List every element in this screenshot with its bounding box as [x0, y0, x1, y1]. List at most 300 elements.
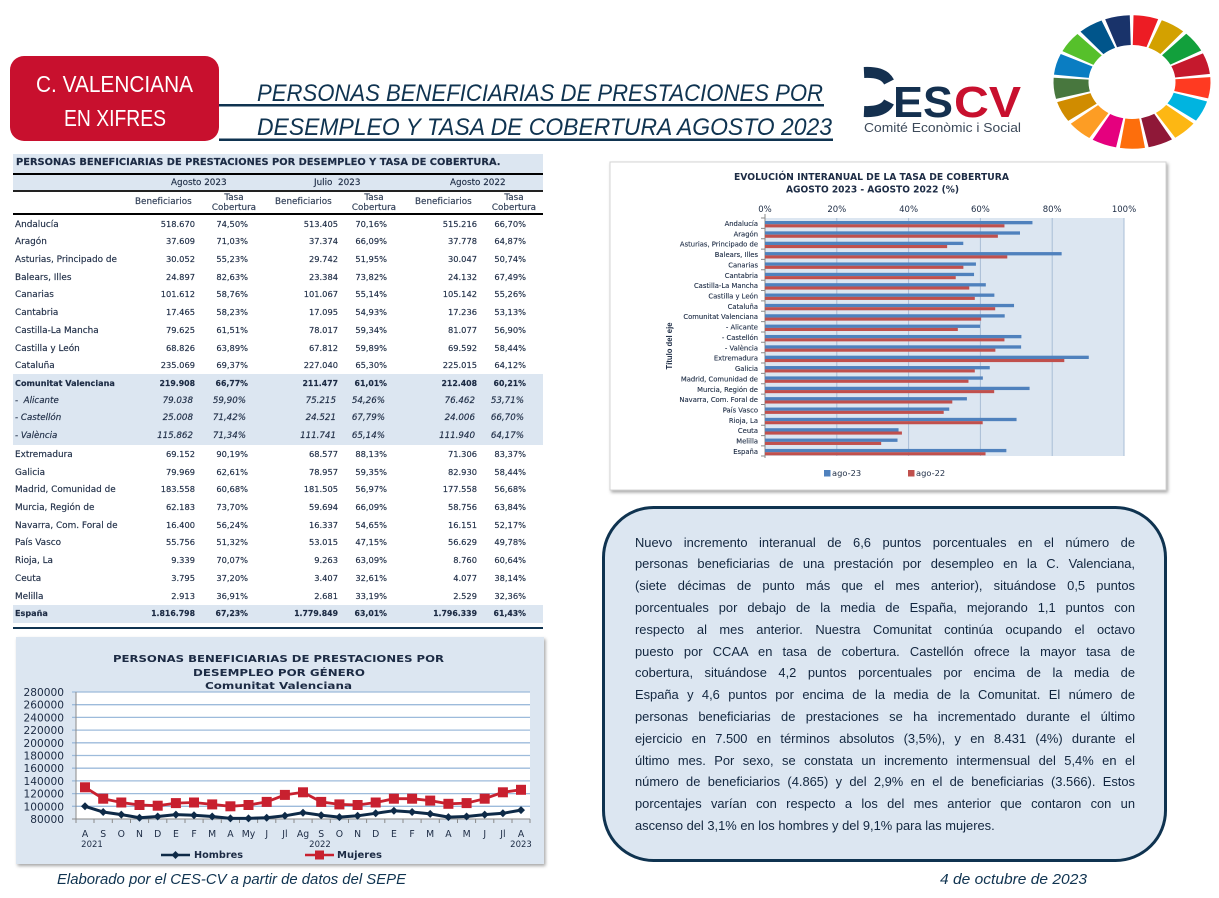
table body rows: 16.337 — [309, 520, 338, 530]
category labels: Ceuta — [738, 427, 758, 435]
table body rows: 9.263 — [314, 555, 338, 565]
table body rows: 24.006 — [445, 413, 475, 423]
table body rows: 24.521 — [306, 413, 336, 423]
table body rows: Extremadura — [15, 450, 73, 460]
table body rows: 24.897 — [166, 272, 195, 282]
table body rows: 55.756 — [166, 537, 195, 547]
table body rows: 37.609 — [166, 236, 195, 246]
panel: line chart by gender — [16, 637, 544, 864]
x axis labels: A — [82, 829, 89, 840]
table column header: Beneficiarios — [275, 197, 332, 207]
x axis labels: J — [482, 829, 486, 840]
table body rows: 30.052 — [166, 254, 195, 264]
table body rows: 25.008 — [163, 413, 193, 423]
title — [219, 80, 833, 141]
table body rows: 59,90% — [213, 396, 246, 406]
x axis labels: M — [426, 829, 434, 840]
table body rows: 61,43% — [494, 609, 526, 618]
x axis labels: J — [264, 829, 268, 840]
category labels: - Alicante — [726, 324, 758, 332]
percentage axis: 60% — [971, 205, 990, 215]
table period header: Julio 2023 — [314, 178, 360, 188]
table body rows: 17.236 — [448, 307, 477, 317]
table body rows: 78.957 — [309, 467, 338, 477]
category labels: - València — [725, 344, 758, 352]
table body rows: 51,32% — [216, 537, 248, 547]
category labels: Madrid, Comunidad de — [681, 375, 758, 383]
x axis labels: S — [100, 829, 106, 840]
table body rows: 1.779.849 — [294, 609, 338, 618]
text block: commentary: ejercicio en 7.500 en términos absolutos (3,5%), y en 8.431 (4%) durante el — [635, 731, 1135, 746]
table body rows: 49,78% — [494, 537, 526, 547]
table column header: Beneficiarios — [415, 197, 472, 207]
line chart title: PERSONAS BENEFICIARIAS DE PRESTACIONES POR — [113, 654, 444, 665]
table body rows: 76.462 — [445, 396, 475, 406]
table body rows: 71,42% — [213, 413, 246, 423]
text block: commentary: ascenso del 3,1% en los hombres y del 9,1% para las mujeres. — [635, 818, 995, 833]
table bottom rule — [13, 627, 543, 629]
table body rows: 70,16% — [355, 218, 387, 228]
table body rows: 1.796.339 — [433, 609, 477, 618]
bar chart legend: ago-23 — [832, 468, 861, 478]
table title: PERSONAS BENEFICIARIAS DE PRESTACIONES POR DESEMPLEO Y TASA DE COBERTURA. — [16, 157, 501, 168]
table body rows: 219.908 — [159, 379, 195, 388]
text block: commentary: cobertura, situándose 4,2 puntos porcentuales por encima de la media de — [635, 665, 1135, 680]
category labels: Comunitat Valenciana — [683, 313, 758, 321]
table body rows: 32,61% — [355, 573, 387, 583]
bars: ago-22 — [765, 224, 1064, 455]
table body rows: Ceuta — [15, 574, 41, 584]
y axis labels: 80000 — [30, 814, 64, 826]
table body rows: 88,13% — [355, 449, 387, 459]
x axis labels: D — [372, 829, 379, 840]
table body rows: 2.529 — [453, 591, 477, 601]
percentage axis: 80% — [1043, 205, 1062, 215]
percentage axis: 20% — [827, 205, 846, 215]
text block: commentary: respecto al mes anterior. Nuestra Comunitat continúa ocupando el octavo — [635, 622, 1135, 637]
table body rows: 60,21% — [494, 379, 526, 388]
table body rows: 74,50% — [216, 218, 248, 228]
table body rows: 66,09% — [355, 502, 387, 512]
table body rows: 513.405 — [304, 218, 338, 228]
table body rows: 518.670 — [161, 218, 195, 228]
table body rows: 58,76% — [216, 289, 248, 299]
y axis labels: 120000 — [24, 789, 64, 801]
table column header: Beneficiarios — [135, 197, 192, 207]
table body rows: Asturias, Principado de — [15, 255, 117, 265]
table column header — [13, 192, 543, 215]
table body rows: Castilla-La Mancha — [15, 326, 99, 336]
table body rows: 90,19% — [216, 449, 248, 459]
x axis labels: A — [227, 829, 234, 840]
table body rows: 70,07% — [216, 555, 248, 565]
table title — [13, 154, 543, 173]
category labels: España — [733, 448, 758, 456]
panel: bar chart of coverage rate — [610, 162, 1166, 490]
table body rows: 115.862 — [157, 431, 193, 441]
bar chart title: AGOSTO 2023 - AGOSTO 2022 (%) — [786, 184, 959, 196]
x axis labels: 2021 — [81, 840, 103, 850]
table body rows: 38,14% — [494, 573, 526, 583]
table body rows: 54,65% — [355, 520, 387, 530]
plot area and gridlines — [72, 692, 530, 823]
percentage axis: 40% — [899, 205, 918, 215]
table body rows — [13, 218, 543, 623]
table body rows: 83,37% — [494, 449, 526, 459]
table body rows: 73,70% — [216, 502, 248, 512]
x axis labels: O — [336, 829, 343, 840]
table body rows: Cantabria — [15, 308, 58, 318]
table body rows: 78.017 — [309, 325, 338, 335]
table period header: Agosto 2023 — [171, 178, 227, 188]
category labels: Melilla — [736, 438, 758, 446]
table body rows: 32,36% — [494, 591, 526, 601]
axis title: Título del eje — [664, 322, 674, 370]
table body rows: 101.612 — [161, 289, 195, 299]
bar chart legend: ago-22 — [916, 468, 945, 478]
table body rows: 65,14% — [352, 431, 385, 441]
table body rows: 82,63% — [216, 272, 248, 282]
table body rows: Rioja, La — [15, 556, 53, 566]
table body rows: 9.339 — [171, 555, 195, 565]
x axis labels — [81, 829, 532, 850]
table body rows: 56,90% — [494, 325, 526, 335]
table body rows: 47,15% — [355, 537, 387, 547]
percentage axis: 0% — [758, 205, 772, 215]
badge: C. Valenciana en xifres — [10, 56, 219, 141]
table body rows: 64,12% — [494, 360, 526, 370]
table body rows: 56,68% — [494, 484, 526, 494]
table body rows: 64,87% — [494, 236, 526, 246]
table period header — [13, 173, 543, 192]
category labels: Navarra, Com. Foral de — [679, 396, 758, 404]
table body rows: 62,61% — [216, 467, 248, 477]
table body rows: 66,70% — [494, 218, 526, 228]
table column header: Tasa — [504, 193, 524, 203]
line chart title: DESEMPLEO POR GÉNERO — [193, 666, 365, 679]
table body rows: 58,44% — [494, 467, 526, 477]
bar chart legend — [824, 468, 945, 478]
badge: C. Valenciana en xifres: EN XIFRES — [64, 105, 166, 131]
y axis labels: 280000 — [24, 687, 64, 699]
table body rows: 36,91% — [216, 591, 248, 601]
category labels: Cantabria — [725, 272, 758, 280]
x axis labels: F — [191, 829, 197, 840]
table body rows: 8.760 — [453, 555, 477, 565]
x axis labels: 2022 — [309, 840, 331, 850]
line chart title — [113, 654, 444, 692]
table body rows: 58,44% — [494, 343, 526, 353]
table body rows: 71,34% — [213, 431, 246, 441]
table body rows: 63,89% — [216, 343, 248, 353]
table body rows: 58,23% — [216, 307, 248, 317]
x axis labels: My — [242, 829, 256, 840]
y axis labels — [24, 687, 64, 826]
table body rows: 37,20% — [216, 573, 248, 583]
table body rows: Cataluña — [15, 361, 55, 371]
table body rows: Balears, Illes — [15, 273, 71, 283]
table body rows: 111.940 — [439, 431, 475, 441]
badge: C. Valenciana en xifres: C. VALENCIANA — [36, 71, 194, 97]
table body rows: 4.077 — [453, 573, 477, 583]
x axis labels: A — [518, 829, 525, 840]
category labels: Galicia — [735, 365, 758, 373]
bar chart title: EVOLUCIÓN INTERANUAL DE LA TASA DE COBERTURA — [734, 171, 1010, 183]
text block: commentary: personas beneficiarias de una prestación por desempleo en la C. Valenciana, — [635, 556, 1135, 571]
table body rows: 17.465 — [166, 307, 195, 317]
table body rows: 69,37% — [216, 360, 248, 370]
logo: CES CV: CV — [954, 78, 1022, 127]
table body rows: 62.183 — [166, 502, 195, 512]
category labels: Castilla-La Mancha — [694, 282, 758, 290]
category labels: País Vasco — [723, 406, 758, 414]
y axis labels: 260000 — [24, 700, 64, 712]
table body rows: 58.756 — [448, 502, 477, 512]
table body rows: 75.215 — [306, 396, 336, 406]
table column header: Cobertura — [212, 203, 256, 213]
text block: commentary: número de beneficiarios (4.865) y del 2,9% en el de beneficiarias (3.566). Estos — [635, 774, 1135, 789]
category labels: Murcia, Región de — [697, 386, 758, 394]
y axis labels: 220000 — [24, 725, 64, 737]
table body rows: 79.625 — [166, 325, 195, 335]
table body rows: 50,74% — [494, 254, 526, 264]
table body rows: 105.142 — [443, 289, 477, 299]
x axis labels: O — [118, 829, 125, 840]
table body rows: 17.095 — [309, 307, 338, 317]
logo: CES CV: Comité Econòmic i Social — [864, 121, 1021, 135]
line chart legend: Mujeres — [337, 850, 382, 861]
table body rows: 53,71% — [491, 396, 524, 406]
table body rows: - Castellón — [15, 413, 61, 423]
title: PERSONAS BENEFICIARIAS DE PRESTACIONES POR — [257, 80, 823, 107]
table body rows: 54,26% — [352, 396, 385, 406]
table body rows: 24.132 — [448, 272, 477, 282]
table body rows: 54,93% — [355, 307, 387, 317]
table body rows: 59,34% — [355, 325, 387, 335]
table body rows: 67.812 — [309, 343, 338, 353]
table body rows: Comunitat Valenciana — [15, 378, 115, 388]
y axis labels: 160000 — [24, 763, 64, 775]
table body rows: 33,19% — [355, 591, 387, 601]
table body rows: 65,30% — [355, 360, 387, 370]
table column header: Tasa — [364, 193, 384, 203]
text block: commentary: personas beneficiarias de prestaciones se ha incrementado durante el último — [635, 709, 1135, 724]
line chart legend — [161, 850, 382, 861]
table body rows: 82.930 — [448, 467, 477, 477]
table body rows: Navarra, Com. Foral de — [15, 521, 118, 531]
category labels: Castilla y León — [708, 292, 758, 300]
table body rows: 53.015 — [309, 537, 338, 547]
table body rows: 66,70% — [491, 413, 524, 423]
table body rows: 66,77% — [216, 379, 248, 388]
table body rows: 212.408 — [441, 379, 477, 388]
table body rows: 59,35% — [355, 467, 387, 477]
table body rows: 177.558 — [443, 484, 477, 494]
text block: commentary: porcentajes varían con respecto a los del mes anterior que contaron con un — [635, 796, 1135, 811]
table body rows: 37.778 — [448, 236, 477, 246]
category labels: Balears, Illes — [715, 251, 758, 259]
table body rows: Castilla y León — [15, 344, 80, 354]
table body rows: 67,23% — [216, 609, 248, 618]
table body rows: 2.913 — [171, 591, 195, 601]
text block: commentary: porcentuales por debajo de la media de España, mejorando 1,1 puntos con — [635, 600, 1135, 615]
table body rows: 73,82% — [355, 272, 387, 282]
table body rows: 515.216 — [443, 218, 477, 228]
x axis labels: D — [154, 829, 161, 840]
category labels: Cataluña — [728, 303, 758, 311]
table body rows: 111.741 — [300, 431, 336, 441]
table body rows: 60,68% — [216, 484, 248, 494]
table body rows: 69.592 — [448, 343, 477, 353]
title: DESEMPLEO Y TASA DE COBERTURA AGOSTO 2023 — [257, 114, 833, 141]
x axis labels: Ag — [297, 829, 309, 840]
table body rows: 1.816.798 — [151, 609, 195, 618]
text block: commentary: puesto por CCAA en tasa de cobertura. Castellón ofrece la mayor tasa de — [635, 644, 1135, 659]
x axis labels: E — [391, 829, 397, 840]
table body rows: - València — [15, 431, 57, 441]
table body rows: España — [15, 608, 48, 618]
table body rows: 81.077 — [448, 325, 477, 335]
table body rows: 61,01% — [355, 379, 387, 388]
x axis labels: N — [136, 829, 143, 840]
panel: data table — [13, 154, 543, 629]
icon: SDG colour wheel — [1046, 9, 1218, 155]
category labels: Andalucía — [725, 220, 758, 228]
table body rows: 69.152 — [166, 449, 195, 459]
bars: ago-23 — [765, 221, 1089, 452]
table body rows: 211.477 — [302, 379, 338, 388]
category labels — [679, 220, 758, 456]
table body rows: País Vasco — [15, 538, 61, 548]
category labels: Asturias, Principado de — [680, 241, 758, 249]
table body rows: 52,17% — [494, 520, 526, 530]
logo: CES CV — [864, 72, 1022, 135]
category labels: Rioja, La — [729, 417, 758, 425]
table body rows: 63,09% — [355, 555, 387, 565]
table body rows: 55,26% — [494, 289, 526, 299]
category labels: - Castellón — [722, 334, 758, 342]
table body rows: 2.681 — [314, 591, 338, 601]
table body rows: Andalucía — [15, 220, 59, 230]
table body rows: 66,09% — [355, 236, 387, 246]
table body rows: 60,64% — [494, 555, 526, 565]
x axis labels: N — [354, 829, 361, 840]
table column header: Cobertura — [492, 203, 536, 213]
table body rows: 16.151 — [448, 520, 477, 530]
x axis labels: E — [173, 829, 179, 840]
table column header: Cobertura — [352, 203, 396, 213]
table body rows: Madrid, Comunidad de — [15, 485, 116, 495]
table body rows: 64,17% — [491, 431, 524, 441]
text block: commentary: Nuevo incremento interanual de 6,6 puntos porcentuales en el número de — [635, 534, 1135, 550]
table body rows: 59,89% — [355, 343, 387, 353]
y axis labels: 100000 — [24, 801, 64, 813]
table body rows: 56,24% — [216, 520, 248, 530]
table body rows: Canarias — [15, 290, 54, 300]
y axis labels: 180000 — [24, 750, 64, 762]
table body rows: 68.577 — [309, 449, 338, 459]
x axis labels: Jl — [499, 829, 506, 840]
x axis labels: A — [445, 829, 452, 840]
x axis labels: M — [208, 829, 216, 840]
percentage axis — [758, 205, 1136, 215]
line: Mujeres — [85, 787, 521, 806]
x axis labels: F — [409, 829, 415, 840]
table body rows: 55,14% — [355, 289, 387, 299]
y axis labels: 200000 — [24, 738, 64, 750]
table body rows: Melilla — [15, 592, 43, 602]
table body rows: 53,13% — [494, 307, 526, 317]
x axis labels: 2023 — [510, 840, 532, 850]
table body rows: 79.969 — [166, 467, 195, 477]
category labels: Extremadura — [714, 355, 758, 363]
table body rows: 79.038 — [163, 396, 193, 406]
table body rows: 227.040 — [304, 360, 338, 370]
y axis labels: 240000 — [24, 712, 64, 724]
date note: 4 de octubre de 2023 — [940, 872, 1087, 888]
table body rows: 183.558 — [161, 484, 195, 494]
line: Hombres — [85, 806, 521, 818]
text block: commentary: (siete décimas de punto más que el mes anterior), situándose 0,5 puntos — [635, 578, 1135, 593]
percentage axis: 100% — [1112, 205, 1136, 215]
table body rows: 55,23% — [216, 254, 248, 264]
table body rows: 63,84% — [494, 502, 526, 512]
table body rows: 67,49% — [494, 272, 526, 282]
table period header: Agosto 2022 — [450, 178, 506, 188]
table body rows: 71.306 — [448, 449, 477, 459]
table body rows: 3.407 — [314, 573, 338, 583]
category labels: Canarias — [728, 261, 758, 269]
table body rows: 101.067 — [304, 289, 338, 299]
x axis labels: Jl — [281, 829, 288, 840]
table body rows: - Alicante — [15, 396, 59, 406]
table column header: Tasa — [224, 193, 244, 203]
table body rows: 3.795 — [171, 573, 195, 583]
table body rows: 67,79% — [352, 413, 385, 423]
table body rows: Galicia — [15, 468, 45, 478]
table body rows: 37.374 — [309, 236, 338, 246]
text block: commentary: último mes. Por sexo, se constata un incremento intermensual del 5,4% en el — [635, 753, 1135, 768]
table body rows: 59.694 — [309, 502, 338, 512]
table body rows: 56.629 — [448, 537, 477, 547]
line chart title: Comunitat Valenciana — [205, 681, 352, 692]
table body rows: 61,51% — [216, 325, 248, 335]
table body rows: Murcia, Región de — [15, 503, 94, 513]
table body rows: 68.826 — [166, 343, 195, 353]
table body rows: 181.505 — [304, 484, 338, 494]
y axis labels: 140000 — [24, 776, 64, 788]
text panel background — [604, 508, 1166, 860]
table body rows: 29.742 — [309, 254, 338, 264]
table body rows: 16.400 — [166, 520, 195, 530]
table body rows: 56,97% — [355, 484, 387, 494]
x axis labels: M — [463, 829, 471, 840]
table body rows: 30.047 — [448, 254, 477, 264]
bar chart title — [734, 171, 1010, 196]
text block: commentary: España y 4,6 puntos por encima de la media de la Comunitat. El número de — [635, 687, 1135, 702]
table body rows: 225.015 — [443, 360, 477, 370]
source note: Elaborado por el CES-CV a partir de datos del SEPE — [57, 872, 406, 888]
table body rows: 63,01% — [355, 609, 387, 618]
line chart legend: Hombres — [194, 850, 243, 861]
category labels: Aragón — [734, 230, 758, 238]
x axis labels: S — [318, 829, 324, 840]
logo: CES CV: ES — [893, 78, 953, 127]
text block: commentary — [635, 534, 1135, 833]
table body rows: 23.384 — [309, 272, 338, 282]
table body rows: Aragón — [15, 237, 47, 247]
table body rows: 51,95% — [355, 254, 387, 264]
